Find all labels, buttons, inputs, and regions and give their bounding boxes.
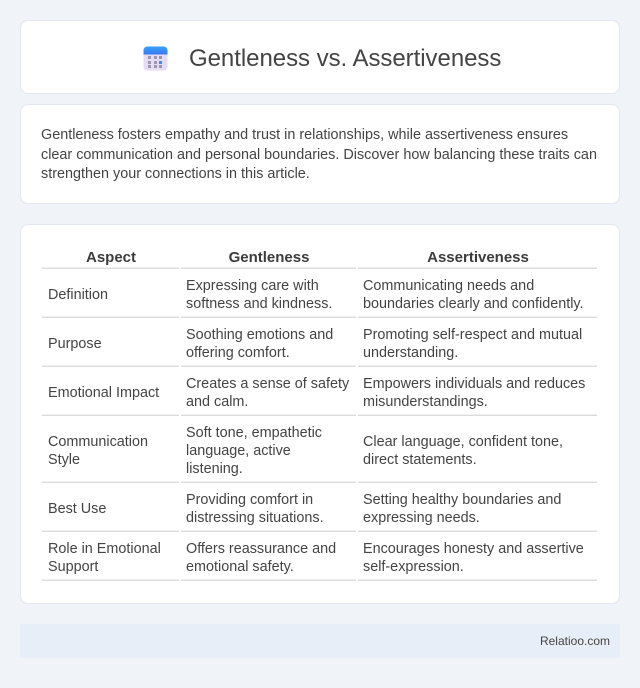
row: best use: [48, 492, 561, 526]
footer credit: Relatioo.com: [540, 634, 610, 648]
row: definition: Communicating needs and: [363, 278, 534, 294]
panel: introduction: [20, 104, 620, 204]
title: Gentleness vs. Assertiveness: [189, 45, 501, 72]
icon: calendar: [144, 46, 168, 70]
row: communication style: Soft tone, empathetic: [186, 425, 322, 441]
row: role in emotional support: Encourages honesty and assertive: [363, 541, 584, 557]
row: role in emotional support: Role in Emotional: [48, 541, 161, 557]
row: purpose: offering comfort.: [186, 345, 290, 361]
intro text: strengthen your connections in this article.: [41, 166, 310, 182]
row: best use: Providing comfort in: [186, 492, 313, 508]
row: best use: expressing needs.: [363, 510, 480, 526]
row: purpose: understanding.: [363, 345, 458, 361]
column headers: Aspect: [86, 249, 136, 266]
comparison table: [42, 249, 597, 581]
row: emotional impact: misunderstandings.: [363, 394, 488, 410]
row: definition: [48, 278, 584, 312]
row: emotional impact: and calm.: [186, 394, 248, 410]
row: communication style: Clear language, confident tone,: [363, 434, 563, 450]
row: best use: Setting healthy boundaries and: [363, 492, 561, 508]
row: best use: Best Use: [48, 501, 106, 517]
column headers: [86, 249, 529, 266]
row: role in emotional support: Offers reassurance and: [186, 541, 336, 557]
intro text: clear communication and personal boundaries. Discover how balancing these traits can: [41, 146, 597, 162]
row: definition: Definition: [48, 287, 108, 303]
row: role in emotional support: emotional safety.: [186, 559, 294, 575]
row: purpose: Soothing emotions and: [186, 327, 333, 343]
row: communication style: direct statements.: [363, 452, 477, 468]
column headers: Gentleness: [229, 249, 309, 266]
row: definition: boundaries clearly and confidently.: [363, 296, 584, 312]
row: purpose: Purpose: [48, 336, 102, 352]
panel: title card: [20, 20, 620, 94]
row: communication style: Style: [48, 452, 80, 468]
row: best use: distressing situations.: [186, 510, 324, 526]
row: emotional impact: Emotional Impact: [48, 385, 159, 401]
row: definition: Expressing care with: [186, 278, 319, 294]
row: emotional impact: [48, 376, 585, 410]
row: purpose: Promoting self-respect and mutual: [363, 327, 582, 343]
row: role in emotional support: Support: [48, 559, 98, 575]
row: communication style: listening.: [186, 461, 243, 477]
row: communication style: language, active: [186, 443, 291, 459]
intro text: Gentleness fosters empathy and trust in relationships, while assertiveness ensures: [41, 127, 568, 143]
row: purpose: [48, 327, 582, 361]
row: definition: softness and kindness.: [186, 296, 332, 312]
row: role in emotional support: [48, 541, 584, 575]
column headers: Assertiveness: [427, 249, 529, 266]
row: emotional impact: Creates a sense of safety: [186, 376, 349, 392]
row: emotional impact: Empowers individuals and reduces: [363, 376, 585, 392]
row: role in emotional support: self-expression.: [363, 559, 464, 575]
row: communication style: [48, 425, 563, 477]
intro text: [41, 127, 597, 182]
panel: comparison table: [20, 224, 620, 604]
footer bar: [20, 624, 620, 658]
row: communication style: Communication: [48, 434, 148, 450]
